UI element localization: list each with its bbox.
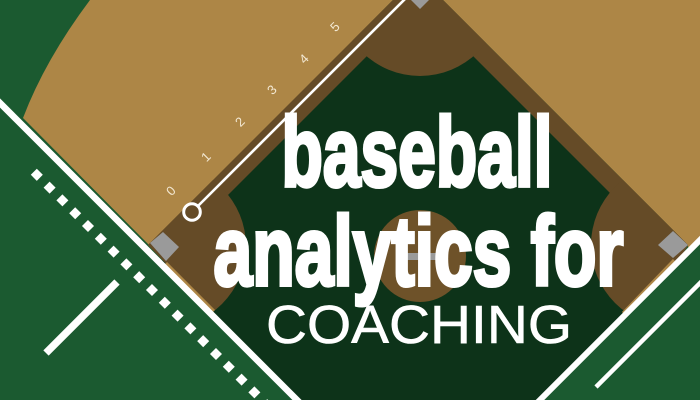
- infield grass: [160, 3, 678, 400]
- left foul line: [0, 98, 302, 400]
- ruler numbers: 4: [296, 51, 312, 67]
- right batter's box line: [596, 279, 700, 387]
- ruler numbers: [163, 19, 343, 199]
- right dirt area: [443, 0, 700, 250]
- ruler start marker: [184, 204, 200, 220]
- dirt edge along left foul line: [166, 263, 214, 311]
- ruler numbers: 5: [327, 19, 343, 35]
- dirt edge along right foul line: [623, 260, 674, 313]
- ruler numbers: 1: [198, 149, 214, 165]
- left dirt area: [23, 0, 393, 246]
- pitcher's mound: [374, 210, 466, 302]
- right foul line: [535, 235, 700, 400]
- left batter's box line: [46, 282, 117, 353]
- title line: baseball: baseball: [282, 97, 552, 207]
- top base: [405, 0, 435, 9]
- right base: [658, 231, 688, 258]
- ruler numbers: 2: [232, 114, 248, 130]
- ruler numbers: 0: [163, 183, 179, 199]
- infield dirt circles: [148, 0, 688, 311]
- title: [214, 97, 624, 355]
- subtitle: COACHING: COACHING: [266, 295, 572, 355]
- left coach's box dashed line: [34, 172, 268, 400]
- left base: [150, 232, 179, 261]
- infield base path band: [148, 0, 688, 400]
- ruler numbers: 3: [264, 82, 280, 98]
- ruler line: [198, 0, 410, 206]
